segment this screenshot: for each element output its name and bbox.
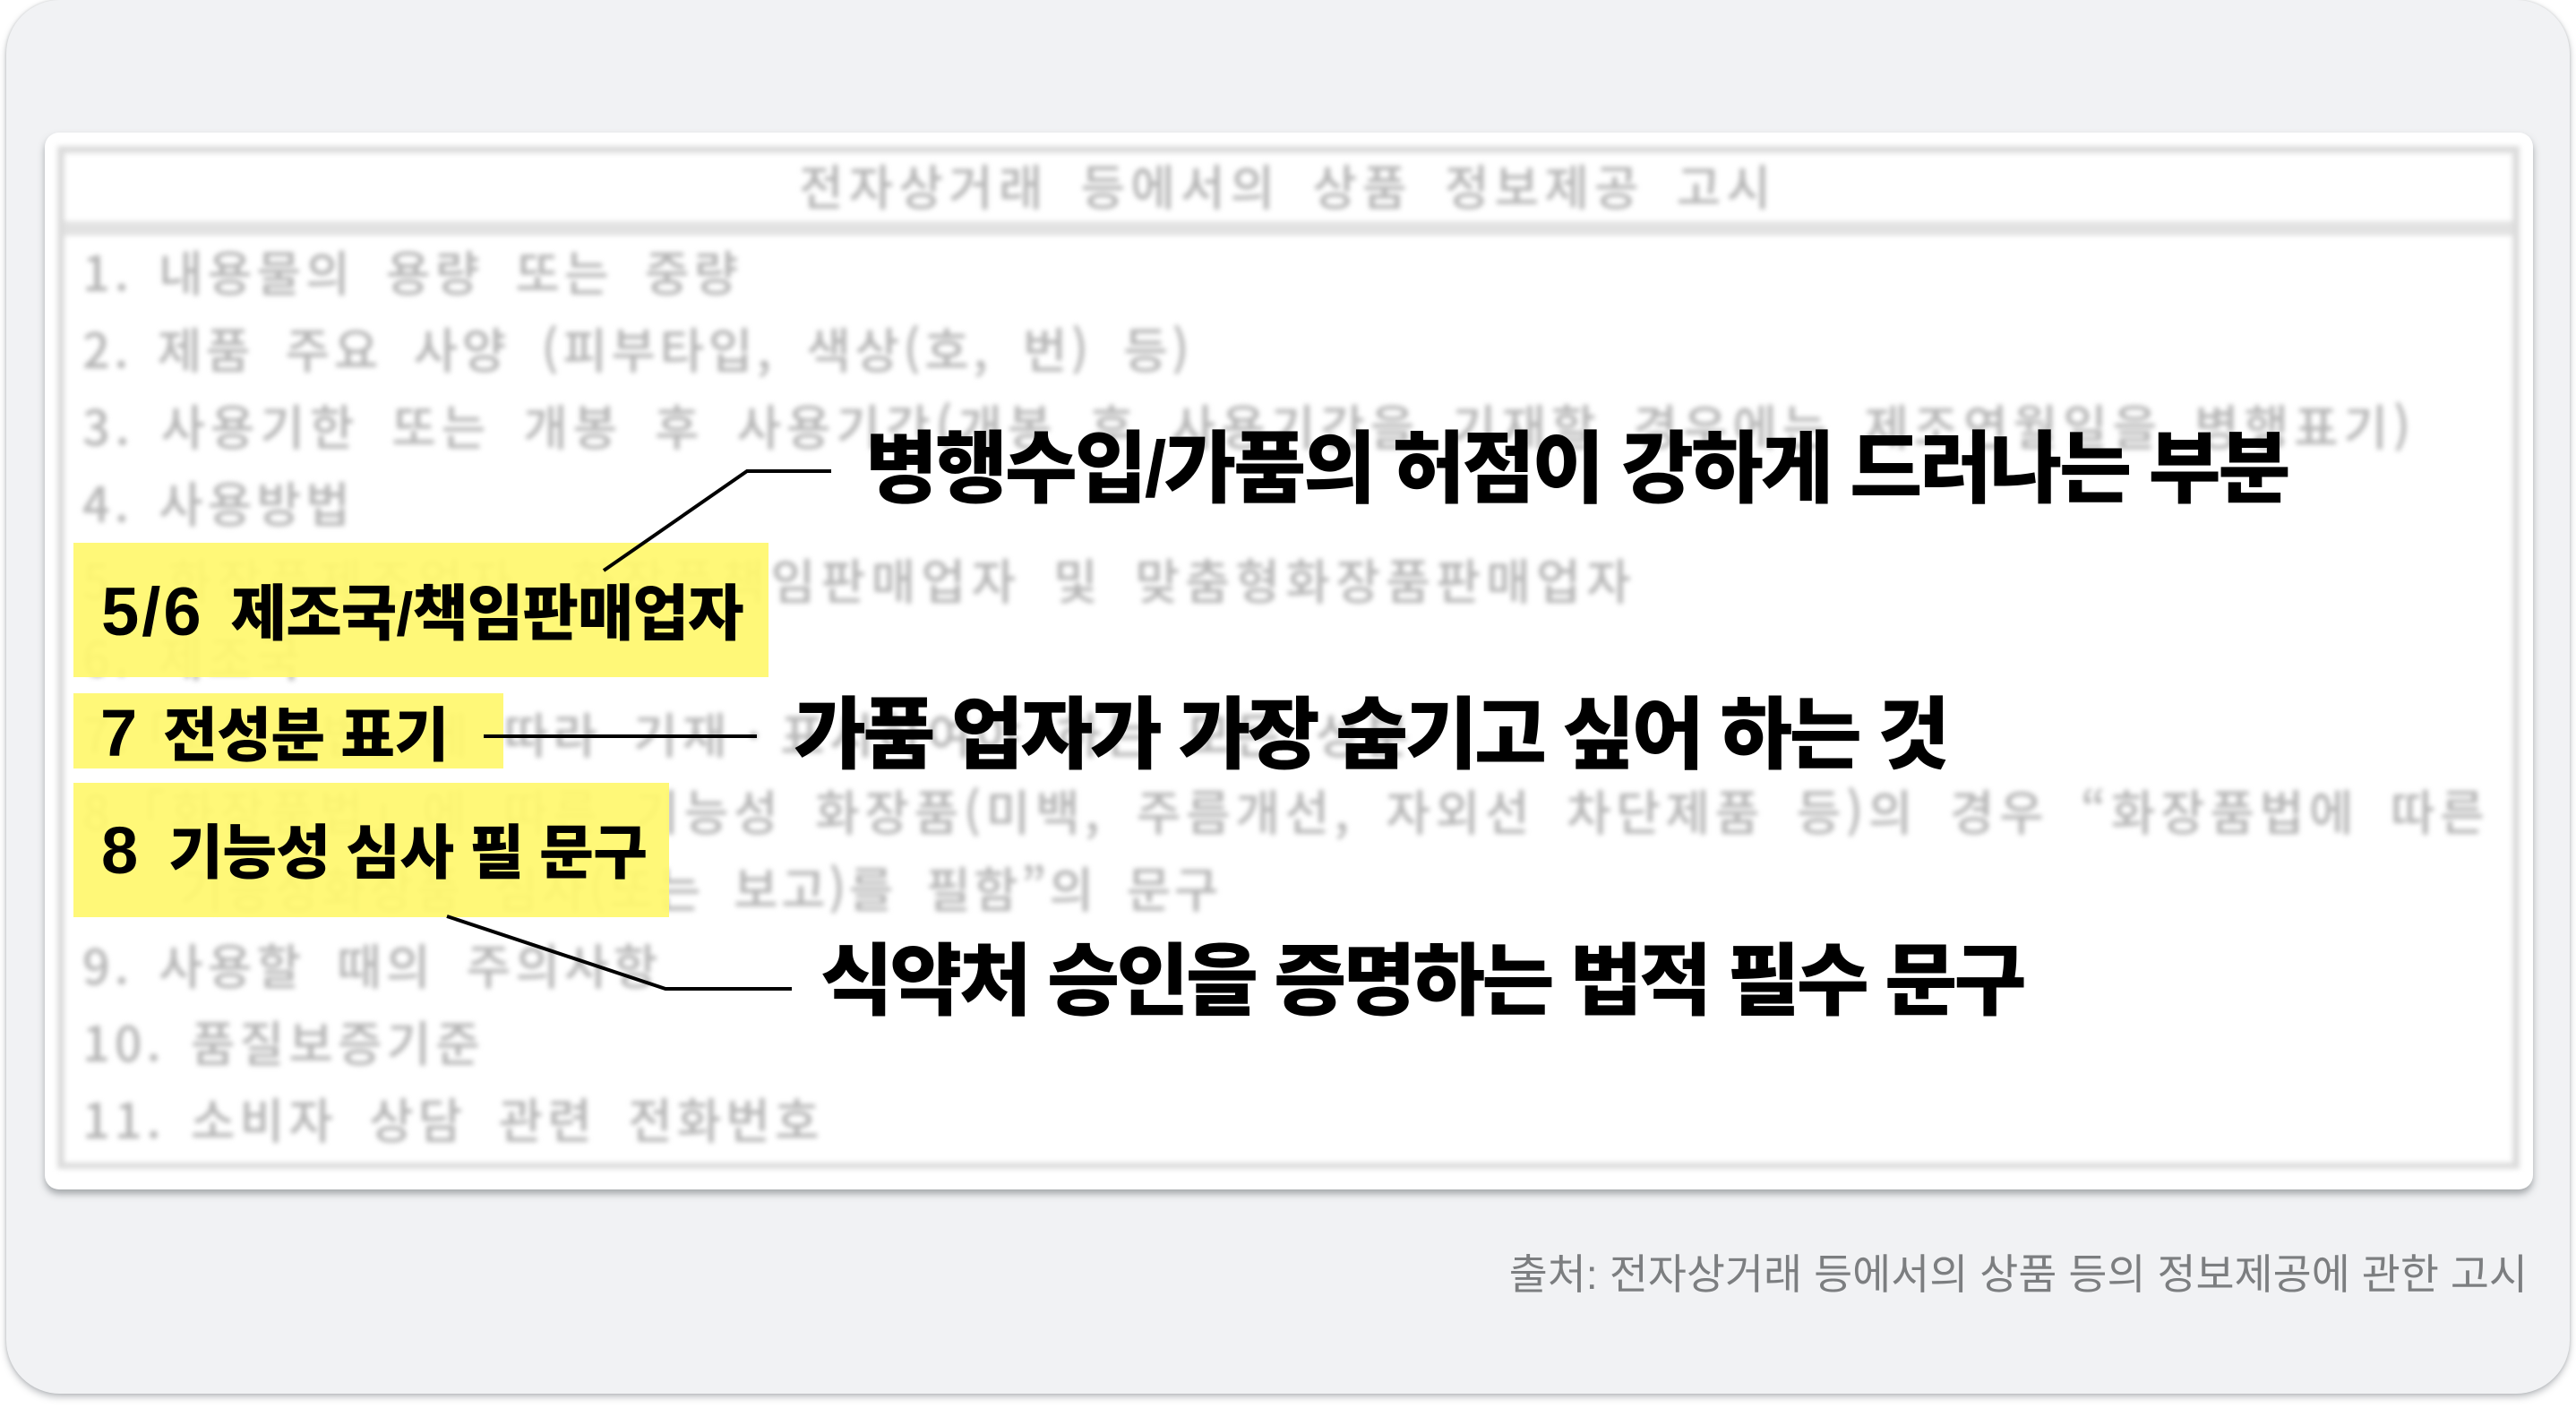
document list line 8 continued: 기능성화장품 심사(또는 보고)를 필함”의 문구: [179, 851, 1222, 922]
document list line 5: 5. 화장품제조업자, 화장품책임판매업자 및 맞춤형화장품판매업자: [82, 543, 1636, 614]
document list line 1: 1. 내용물의 용량 또는 중량: [82, 235, 743, 305]
document list line 10: 10. 품질보증기준: [82, 1005, 485, 1076]
leader line: item 8: [447, 916, 792, 989]
highlight label: 5/6: 5/6 제조국/책임판매업자: [101, 574, 743, 650]
leader line: items 5/6: [604, 471, 831, 571]
highlight: items 5/6: [73, 543, 769, 677]
document list line 11: 11. 소비자 상담 관련 전화번호: [82, 1082, 824, 1153]
document list line 2: 2. 제품 주요 사양 (피부타입, 색상(호, 번) 등): [82, 312, 1193, 382]
highlight label: 8: 8 기능성 심사 필 문구: [101, 813, 647, 888]
document list line 8: 8. 「화장품법」에 따른 기능성 화장품(미백, 주름개선, 자외선 차단제품 등)의 경우 “화장품법에 따른: [82, 774, 2489, 845]
highlight: item 7: [73, 693, 503, 768]
document list line 7: 7. 「화장품법」에 따라 기재ㆍ표시하여야 하는 모든 성분: [82, 697, 1413, 768]
document title: 전자상거래 등에서의 상품 정보제공 고시: [799, 149, 1776, 219]
highlight label: 7: 7 전성분 표기: [100, 696, 448, 770]
document list line 6: 6. 제조국: [82, 620, 305, 691]
document list line 9: 9. 사용할 때의 주의사항: [82, 928, 662, 999]
document list line 3: 3. 사용기한 또는 개봉 후 사용기간(개봉 후 사용기간을 기재할 경우에는 제조연월일을 병행표기): [82, 389, 2416, 459]
highlight: item 8: [73, 783, 669, 917]
callout: counterfeiters hide: 가품 업자가 가장 숨기고 싶어 하는 것: [794, 691, 1947, 779]
source note: 출처: 전자상거래 등에서의 상품 등의 정보제공에 관한 고시: [1509, 1251, 2528, 1298]
callout: parallel import weakness: 병행수입/가품의 허점이 강하게 드러나는 부분: [865, 425, 2288, 513]
callout: legal phrase: 식약처 승인을 증명하는 법적 필수 문구: [820, 937, 2023, 1026]
leader line: item 7: [484, 734, 757, 738]
panel: document card: [45, 133, 2533, 1189]
document list line 4: 4. 사용방법: [82, 466, 355, 537]
